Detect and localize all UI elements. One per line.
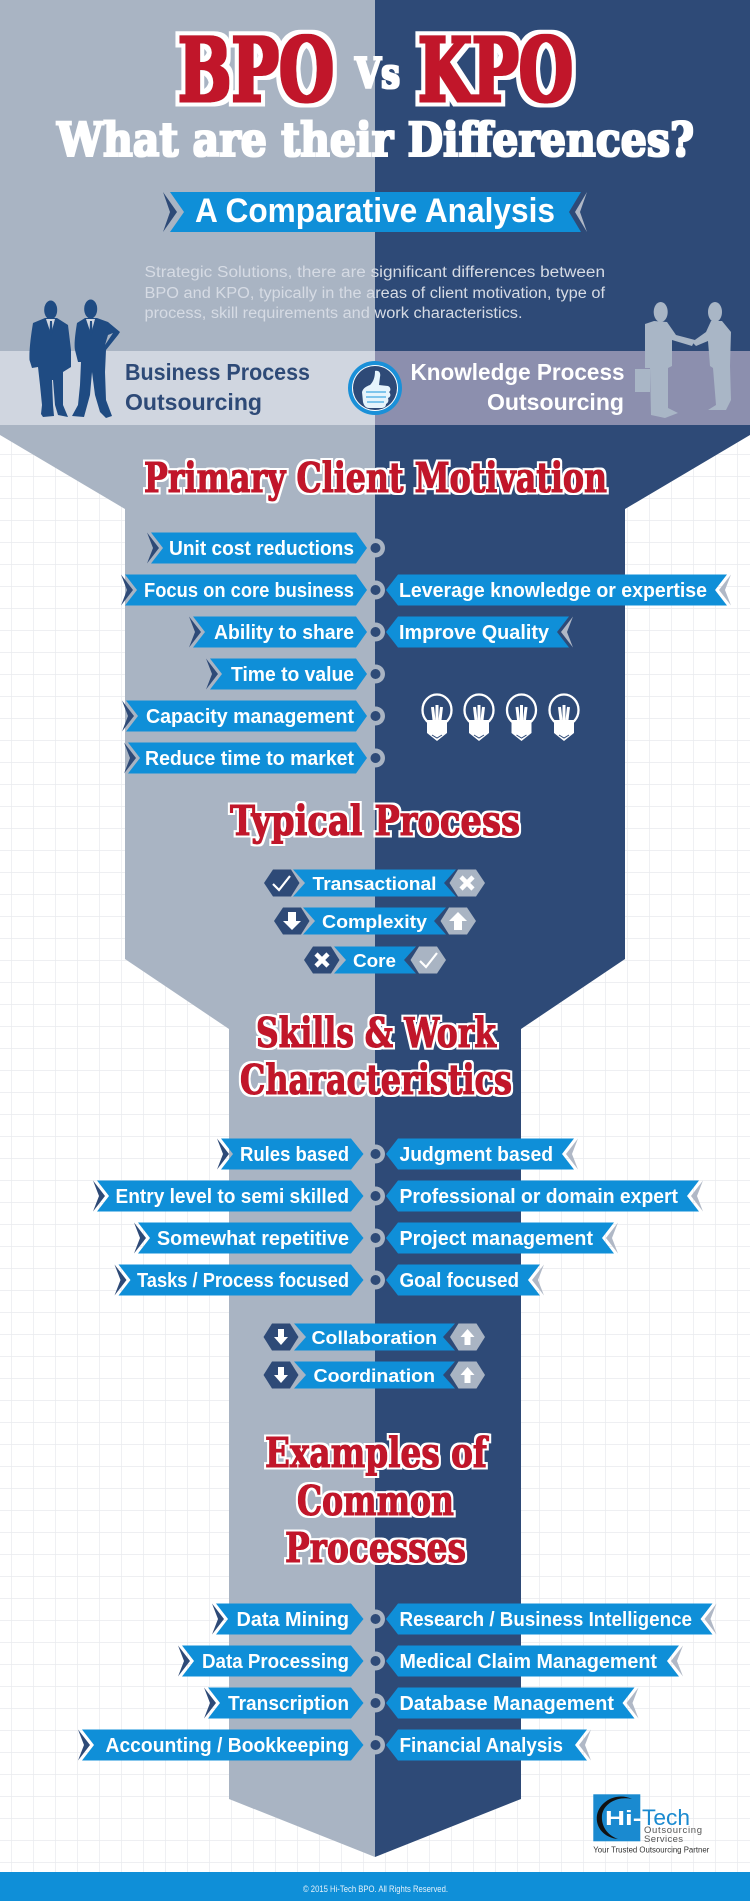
ribbon: Transcription: Transcription [228,1693,349,1715]
ribbon: Ability to share: Ability to share [214,622,354,644]
ribbon: Financial Analysis: Financial Analysis [400,1735,563,1757]
intro paragraph: BPO and KPO, typically in the areas of client motivation, type of [144,285,606,302]
heading: Examples of Common Processes: Common [297,1477,454,1525]
footer bar: © 2015 Hi-Tech BPO. All Rights Reserved. [303,1884,448,1895]
ribbon: Accounting / Bookkeeping: Accounting / Bookkeeping [106,1735,349,1757]
ribbon: Transcription [204,1688,364,1718]
ribbon: Entry level to semi skilled: Entry level to semi skilled [116,1186,349,1208]
title: BPO Vs KPO [178,18,573,122]
heading: Knowledge Process Outsourcing: Knowledge Process [410,359,624,385]
ribbon: Leverage knowledge or expertise: Leverage knowledge or expertise [399,580,707,602]
row: Core: Core [353,950,396,971]
logo: Hi-Tech Outsourcing Services: Your Trusted Outsourcing Partner [593,1846,710,1854]
row: Complexity [274,908,476,934]
row: Coordination: Coordination [314,1365,435,1386]
ribbon: Research / Business Intelligence [386,1604,716,1634]
ribbon: Leverage knowledge or expertise [386,574,731,606]
panel: KPO funnel right side [375,0,750,1857]
row: Collaboration: Collaboration [312,1327,437,1348]
heading: Skills & Work Characteristics [240,1009,512,1104]
heading: Examples of Common Processes: Processes [285,1524,466,1572]
ribbon: Time to value: Time to value [231,664,354,686]
title: BPO Vs KPO: KPO [418,18,573,122]
row: Collaboration [264,1324,485,1350]
icon: two businessmen [29,300,120,418]
ribbon: Focus on core business: Focus on core business [144,580,354,602]
logo: Hi-Tech Outsourcing Services: Outsourcing [644,1825,702,1836]
ribbon: Entry level to semi skilled [93,1180,364,1212]
ribbon: Professional or domain expert: Professional or domain expert [400,1186,678,1208]
ribbon: Capacity management [122,700,367,732]
icon: four light bulbs [422,694,578,741]
ribbon: Project management: Project management [400,1228,593,1250]
ribbon: Data Processing: Data Processing [202,1651,349,1673]
heading: Skills & Work Characteristics: Characteristics [240,1056,512,1104]
panel: BPO funnel left side [0,0,375,1857]
logo: Hi-Tech Outsourcing Services: Services [644,1834,683,1845]
connector dots: skills [366,1144,385,1290]
connector dots: examples [366,1610,385,1754]
ribbon: Medical Claim Management: Medical Claim Management [400,1651,657,1673]
ribbon: Rules based [217,1138,364,1170]
row: Complexity: Complexity [322,911,428,932]
ribbon: Data Processing [178,1646,364,1676]
ribbon: Professional or domain expert [386,1180,703,1212]
ribbon: Somewhat repetitive: Somewhat repetitive [157,1228,349,1250]
ribbon: Medical Claim Management [386,1646,683,1676]
logo: Hi-Tech Outsourcing Services: Hi- [605,1808,642,1830]
logo: Hi-Tech Outsourcing Services: Tech [642,1805,690,1830]
heading: Examples of Common Processes: Examples of [265,1429,489,1477]
ribbon: Ability to share [189,616,367,648]
ribbon: Database Management: Database Management [400,1693,614,1715]
title: BPO Vs KPO: BPO [178,18,334,122]
heading: Business Process Outsourcing: Business Process [125,359,310,385]
row: Transactional [264,870,485,896]
heading: Primary Client Motivation: Primary Client Motivation [144,454,607,502]
icon: thumbs up badge [348,361,402,415]
ribbon: Rules based: Rules based [240,1144,349,1166]
row: Coordination [264,1362,485,1388]
footer bar [0,1872,750,1901]
ribbon: Accounting / Bookkeeping [78,1730,364,1760]
ribbon: Judgment based: Judgment based [400,1144,553,1166]
ribbon: Data Mining [212,1604,364,1634]
logo: Hi-Tech Outsourcing Services [593,1794,710,1854]
heading: Typical Process: Typical Process [230,797,520,845]
heading: Examples of Common Processes [265,1429,489,1572]
ribbon: Unit cost reductions: Unit cost reductions [169,538,354,560]
connector dots: motivation [366,538,385,768]
intro paragraph [144,264,606,322]
ribbon: Improve Quality: Improve Quality [399,622,550,644]
ribbon: Data Mining: Data Mining [236,1609,349,1631]
band: KPO label background [375,351,750,425]
heading: Skills & Work Characteristics: Skills & Work [256,1009,497,1057]
ribbon: Focus on core business [121,574,367,606]
ribbon: Goal focused: Goal focused [400,1270,519,1292]
intro paragraph: process, skill requirements and work characteristics. [144,305,522,322]
ribbon: Goal focused [386,1264,544,1296]
heading: Knowledge Process Outsourcing: Outsourcing [487,389,624,415]
ribbon: Capacity management: Capacity management [146,706,354,728]
icon: two men shaking hands [635,302,731,418]
band: BPO label background [0,351,375,425]
title: BPO Vs KPO: Vs [354,49,400,98]
heading: Knowledge Process Outsourcing [410,359,624,415]
ribbon: Time to value [206,658,367,690]
ribbon: Research / Business Intelligence: Research / Business Intelligence [400,1609,692,1631]
ribbon: Financial Analysis [386,1730,591,1760]
row: Core [304,946,446,974]
ribbon: Database Management [386,1688,638,1718]
ribbon: Judgment based [386,1138,578,1170]
ribbon: Project management [386,1222,618,1254]
ribbon: Tasks / Process focused: Tasks / Process focused [137,1270,349,1292]
ribbon: Tasks / Process focused [114,1264,364,1296]
ribbon: Improve Quality [386,616,573,648]
intro paragraph: Strategic Solutions, there are significant differences between [144,264,605,281]
subtitle ribbon: A Comparative Analysis [195,192,555,230]
ribbon: Somewhat repetitive [134,1222,364,1254]
heading: Business Process Outsourcing: Outsourcing [125,389,262,415]
ribbon: Reduce time to market: Reduce time to market [145,748,354,770]
ribbon: Reduce time to market [124,742,367,774]
heading: Business Process Outsourcing [125,359,310,415]
row: Transactional: Transactional [312,873,436,894]
ribbon: Unit cost reductions [147,532,367,564]
